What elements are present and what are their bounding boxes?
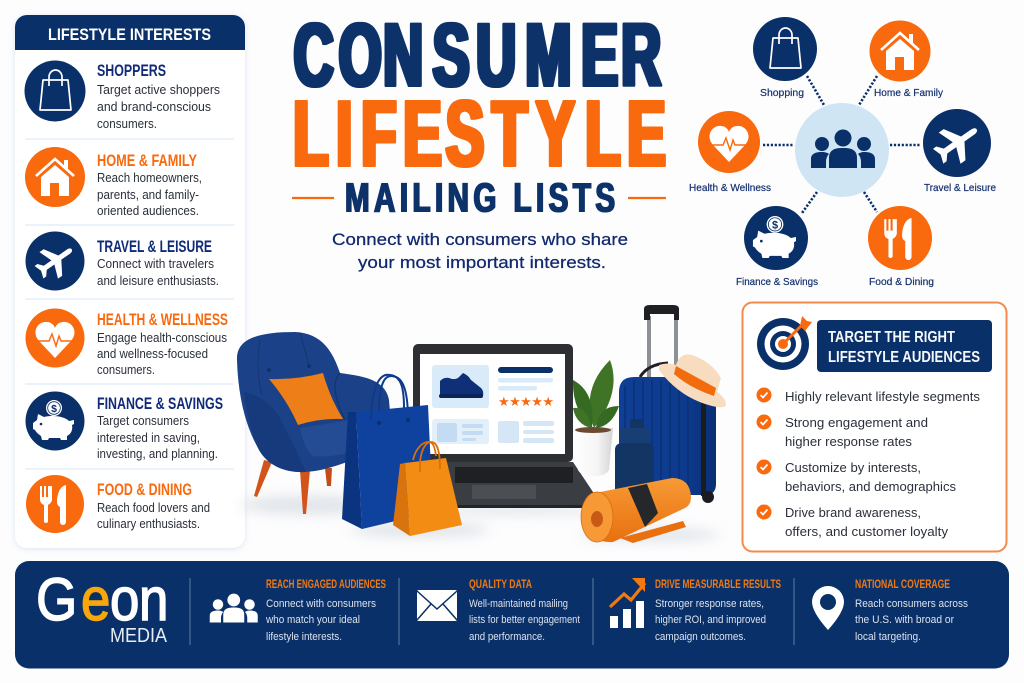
node: finance and savings: [736, 206, 818, 288]
checklist: offers, and customer loyalty: [785, 524, 949, 539]
item: home and family: parents, and family-: [97, 188, 199, 202]
item: travel and leisure: and leisure enthusiasts.: [97, 274, 219, 288]
icon: target with arrow: [757, 316, 812, 370]
item: finance and savings: Target consumers: [97, 414, 189, 428]
item: finance and savings: FINANCE & SAVINGS: [97, 394, 223, 413]
node: health and wellness: [689, 111, 771, 194]
checklist: [785, 389, 981, 539]
item: health and wellness: Engage health-conscious: [97, 331, 227, 345]
item: shoppers: consumers.: [97, 117, 157, 131]
benefit: national coverage: the U.S. with broad or: [855, 614, 954, 626]
heading: lifestyle interests: LIFESTYLE INTERESTS: [48, 25, 211, 44]
checklist: higher response rates: [785, 434, 912, 449]
benefit: national coverage: Reach consumers across: [855, 598, 968, 610]
benefit: drive measurable results: Stronger response rates,: [655, 598, 764, 610]
benefit: national coverage: local targeting.: [855, 631, 921, 643]
plant: [573, 360, 619, 476]
benefit: reach engaged audiences: lifestyle interests.: [266, 631, 342, 643]
benefit: quality data: [417, 577, 580, 643]
benefit: drive measurable results: higher ROI, and improved: [655, 614, 766, 626]
item: health and wellness: [26, 308, 228, 377]
item: food and dining: Reach food lovers and: [97, 501, 210, 515]
banner heading: [817, 320, 992, 372]
logo: geon media: MEDIA: [110, 625, 168, 647]
item: shoppers: SHOPPERS: [97, 61, 166, 80]
checklist: Drive brand awareness,: [785, 505, 921, 520]
item: shoppers: and brand-conscious: [97, 100, 211, 114]
benefit: drive measurable results: DRIVE MEASURABLE RESULTS: [655, 577, 781, 591]
item: shoppers: Target active shoppers: [97, 83, 220, 97]
item: travel and leisure: Connect with travelers: [97, 257, 214, 271]
screen product card: [432, 365, 489, 408]
title line: mailing lists: MAILING LISTS: [345, 175, 619, 221]
node: shopping: Shopping: [760, 87, 804, 99]
subtitle: Connect with consumers who share: [332, 231, 628, 249]
item: home and family: [25, 147, 202, 218]
item: food and dining: FOOD & DINING: [97, 480, 192, 499]
checklist: behaviors, and demographics: [785, 479, 956, 494]
title line: lifestyle: LIFESTYLE: [293, 83, 666, 186]
benefit: national coverage: NATIONAL COVERAGE: [855, 577, 950, 591]
item: travel and leisure: TRAVEL & LEISURE: [97, 237, 212, 256]
benefit: quality data: lists for better engagement: [469, 614, 580, 626]
footer band: [15, 561, 1009, 668]
node: travel and leisure: [923, 109, 996, 194]
item: health and wellness: HEALTH & WELLNESS: [97, 310, 228, 329]
item: food and dining: culinary enthusiasts.: [97, 517, 200, 531]
panel: lifestyle interests: [15, 15, 245, 548]
hub centre: [795, 103, 889, 197]
item: finance and savings: interested in saving,: [97, 431, 200, 445]
sun hat: [659, 354, 726, 407]
suitcase: [619, 305, 726, 503]
node: health and wellness: Health & Wellness: [689, 182, 771, 194]
benefit: quality data: QUALITY DATA: [469, 577, 532, 591]
item: food and dining: [26, 475, 210, 533]
logo: geon media: Geon: [36, 566, 168, 633]
panel: target the right lifestyle audiences: [742, 302, 1006, 552]
benefit: reach engaged audiences: [210, 577, 386, 643]
node: shopping: [753, 17, 817, 99]
benefit: quality data: Well-maintained mailing: [469, 598, 568, 610]
item: home and family: Reach homeowners,: [97, 171, 202, 185]
item: travel and leisure: [26, 232, 219, 290]
benefit: drive measurable results: [610, 577, 781, 643]
item: home and family: HOME & FAMILY: [97, 151, 197, 170]
item: finance and savings: [26, 392, 223, 461]
node: finance and savings: Finance & Savings: [736, 276, 818, 288]
node: travel and leisure: Travel & Leisure: [924, 182, 996, 194]
node: food and dining: [868, 206, 934, 288]
panel header: [15, 15, 245, 50]
banner heading: TARGET THE RIGHT: [828, 329, 955, 346]
title: [292, 5, 666, 221]
node: home and family: Home & Family: [874, 87, 944, 99]
node: home and family: [870, 20, 944, 99]
water bottle: [615, 419, 654, 492]
benefit: drive measurable results: campaign outcomes.: [655, 631, 746, 643]
illustration: lifestyle products: [237, 305, 726, 543]
checklist: Highly relevant lifestyle segments: [785, 389, 981, 404]
checklist: Customize by interests,: [785, 460, 921, 475]
benefit: quality data: and performance.: [469, 631, 545, 643]
banner heading: LIFESTYLE AUDIENCES: [828, 349, 980, 366]
laptop: [413, 344, 597, 508]
title line: consumer: CONSUMER: [294, 5, 661, 105]
checklist: Strong engagement and: [785, 415, 928, 430]
item: shoppers: [24, 60, 220, 131]
benefit: reach engaged audiences: Connect with consumers: [266, 598, 376, 610]
item: health and wellness: consumers.: [97, 363, 155, 377]
benefit: national coverage: [812, 577, 968, 643]
shopping bags: [342, 375, 462, 536]
armchair: [237, 332, 390, 514]
subtitle: [332, 231, 628, 272]
benefit: reach engaged audiences: REACH ENGAGED AUDIENCES: [266, 577, 386, 591]
pillow: [269, 373, 343, 425]
hub diagram: [689, 17, 996, 288]
star rating: ★★★★★: [498, 395, 554, 410]
benefit: reach engaged audiences: who match your ideal: [265, 614, 360, 626]
node: food and dining: Food & Dining: [869, 276, 934, 288]
item: finance and savings: investing, and planning.: [97, 447, 218, 461]
item: health and wellness: and wellness-focused: [97, 347, 208, 361]
item: home and family: oriented audiences.: [97, 204, 199, 218]
subtitle: your most important interests.: [358, 254, 606, 272]
rolled yoga mat: [581, 478, 691, 543]
